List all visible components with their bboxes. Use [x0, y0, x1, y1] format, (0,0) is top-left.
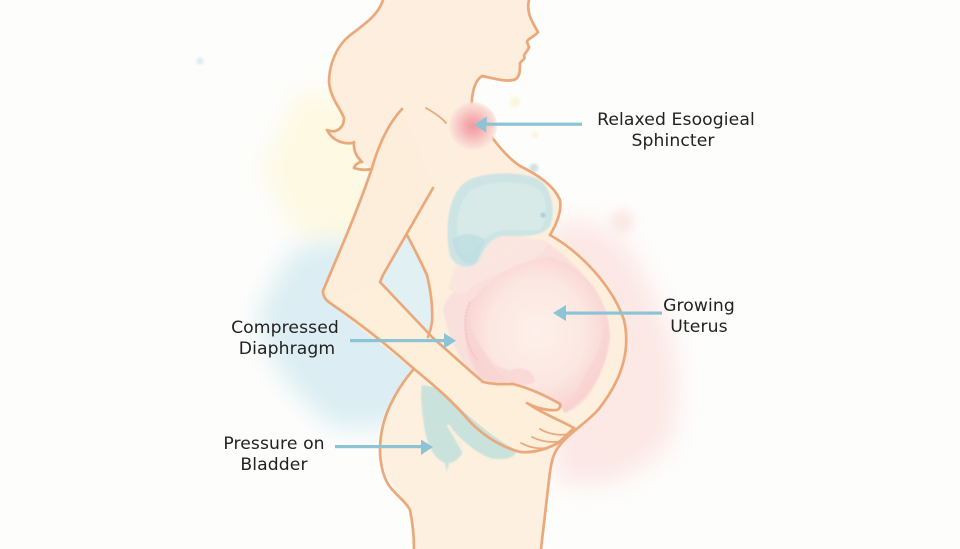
label: Compressed Diaphragm: Compressed [231, 318, 339, 338]
body fill [323, 0, 628, 549]
label: Relaxed Esoogieal Sphincter: Sphincter [631, 131, 715, 151]
upper arm fill [323, 110, 433, 305]
arrow: growing uterus [553, 305, 662, 321]
background watercolor washes [196, 58, 678, 485]
organ: stomach [447, 173, 553, 267]
label: Relaxed Esoogieal Sphincter: Relaxed Esoogieal [597, 110, 755, 130]
body outline [323, 0, 626, 549]
arrow: esophageal sphincter [474, 116, 582, 132]
arrow: bladder pressure [335, 440, 433, 455]
organ: growing uterus and pink wash [443, 235, 610, 417]
label: Pressure on Bladder: Pressure on [223, 434, 325, 454]
label: Growing Uterus: Growing [663, 296, 735, 316]
background gap between arm and torso [380, 235, 432, 337]
forearm and hand fill [325, 282, 573, 452]
figure: pregnant woman silhouette [323, 0, 628, 549]
label: Growing Uterus: Uterus [670, 317, 728, 337]
organ: bladder [421, 385, 517, 472]
arrow: compressed diaphragm [350, 333, 456, 348]
label: Compressed Diaphragm: Diaphragm [239, 339, 335, 359]
label: Pressure on Bladder: Bladder [240, 455, 308, 475]
red reflux spot [449, 102, 497, 150]
